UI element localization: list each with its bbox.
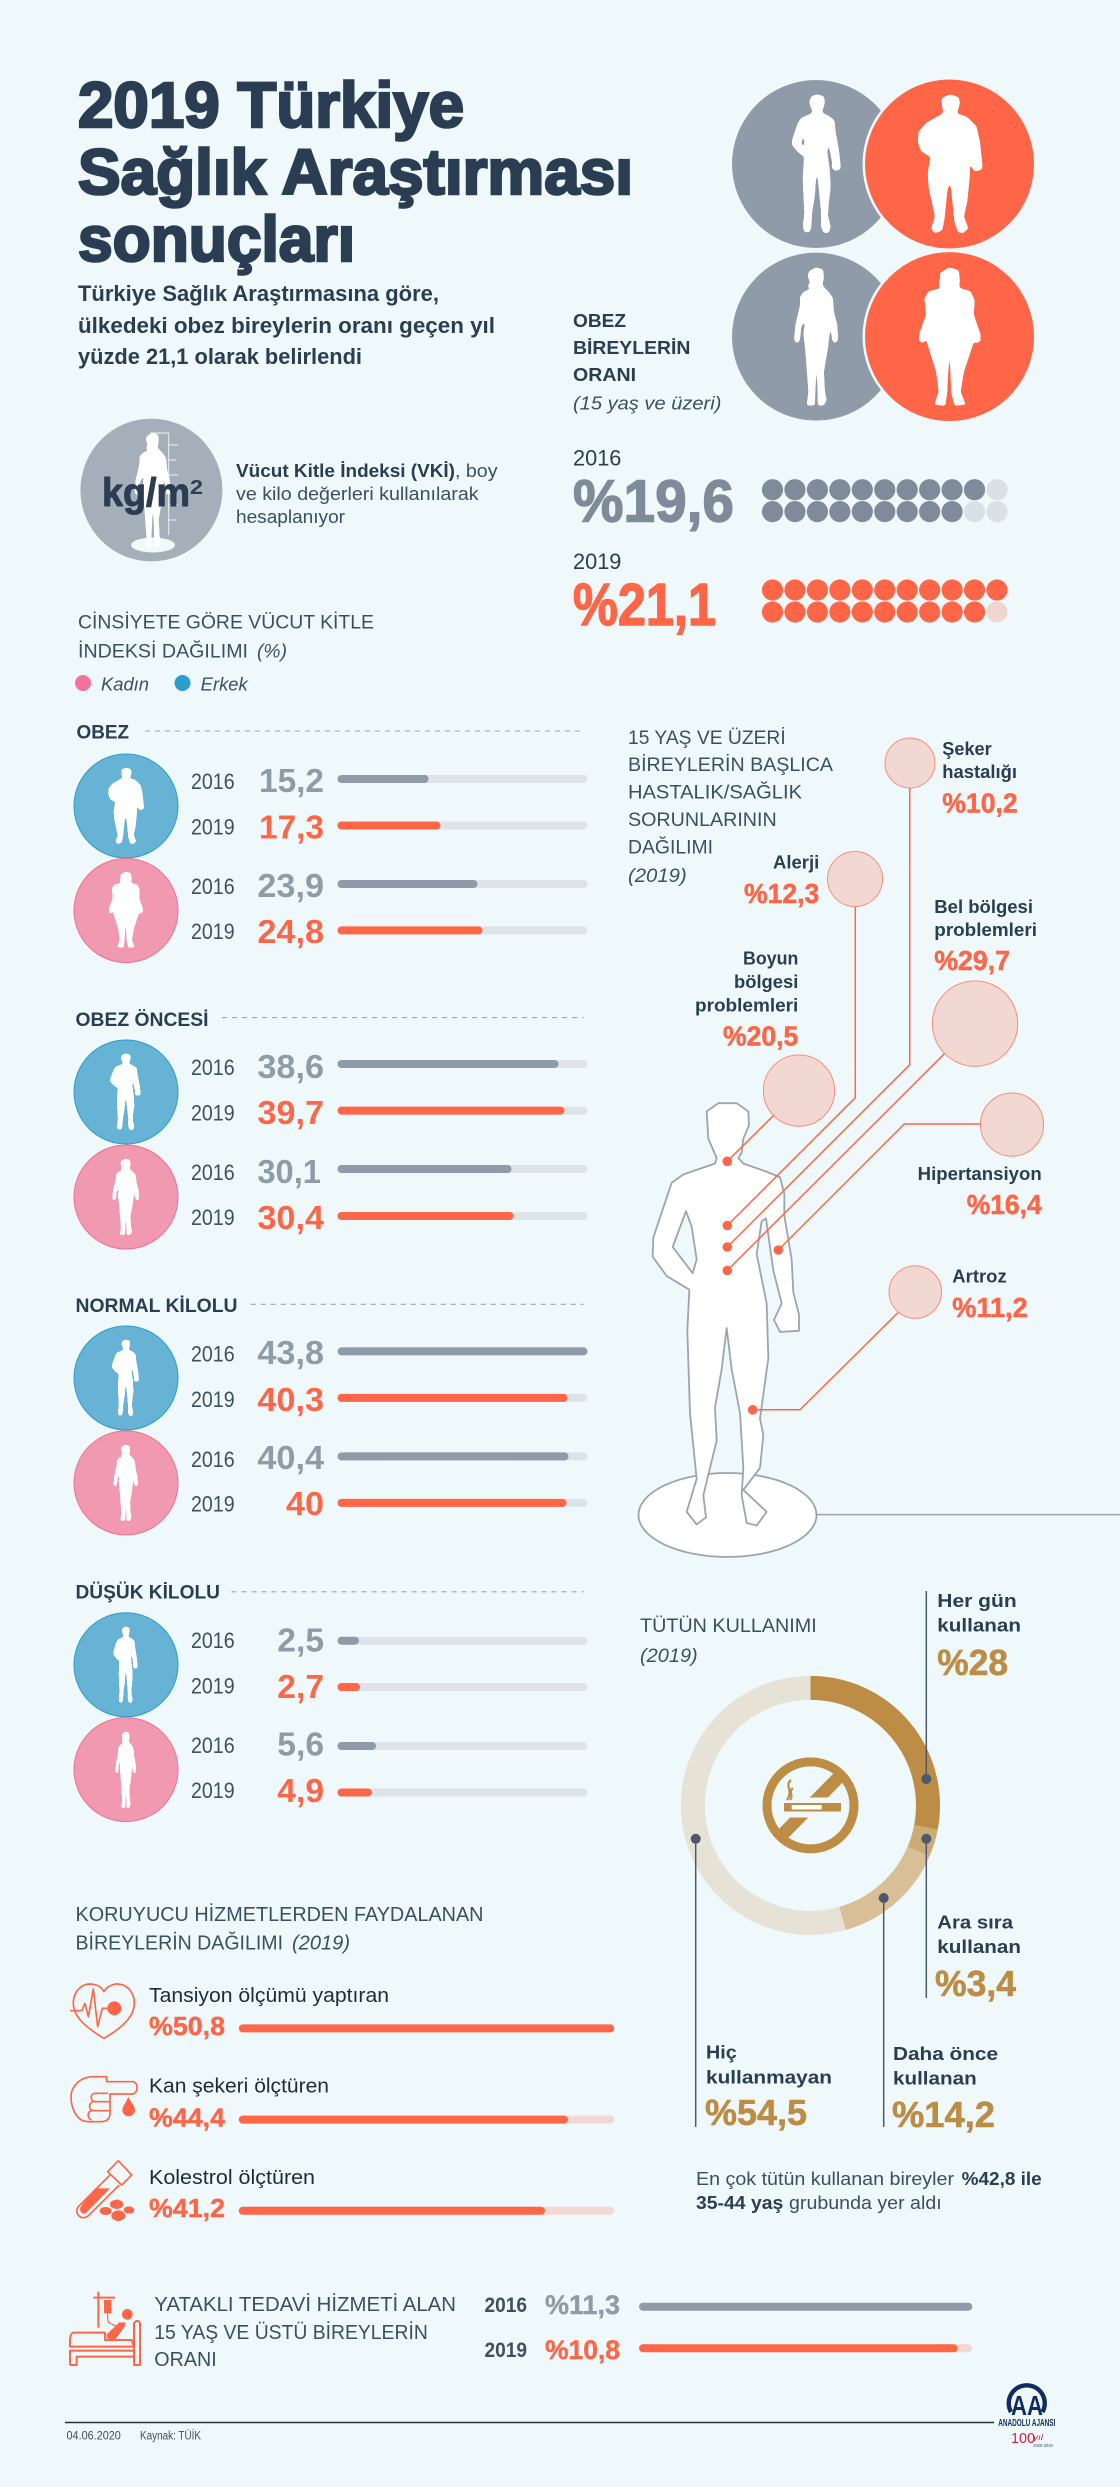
row men 2016: 15,2 [259,762,324,799]
stat: 2019 obese rate: 2019 [573,549,621,574]
callout: Bel bölgesi: %29,7 [934,945,1010,976]
row women 2019 [191,1772,588,1809]
row men 2016: 2016 [191,1628,235,1653]
callout: Daha önce: %14,2 [892,2094,995,2135]
row men 2019: 2019 [191,815,235,840]
panel: OBEZ ÖNCESİ [74,1010,588,1249]
heading: health problems: SORUNLARININ [628,810,777,831]
heading: BMI by gender: (%) [257,642,287,663]
stat: 2019 obese rate: %21,1 [573,572,716,638]
heading: health problems: HASTALIK/SAĞLIK [628,782,802,804]
row: inpatient 2016 [484,2290,972,2320]
heading: tobacco [640,1616,817,1667]
legend: Erkek [201,675,249,695]
callout: Hiç kullanmayan: %54,5 [705,2092,807,2133]
row men 2016: 2016 [191,1341,235,1366]
body dots [722,1156,783,1415]
row women 2019: 2019 [191,1205,235,1230]
icon: obese man [918,95,982,233]
icon: test tube [77,2161,134,2221]
subtitle: yüzde 21,1 olarak belirlendi [78,344,362,369]
logo: Anadolu Ajansı: 1920-2020 [1033,2443,1053,2448]
callout: Her gün: kullanan [937,1616,1021,1636]
callout: Hiç kullanmayan [691,1834,832,2133]
heading: health problems: 15 YAŞ VE ÜZERİ [628,728,786,749]
text: VKI explanation: Vücut Kitle İndeksi (VKİ) [236,461,455,481]
callout: Boyun bölgesi: Boyun [743,948,798,968]
footer rule [65,2422,994,2424]
heading: preventive services [76,1903,484,1955]
dot rows 2019 [762,579,1008,623]
logo: Anadolu Ajansı [998,2385,1055,2448]
woman circle [74,858,178,962]
callout: Boyun bölgesi [695,948,835,1126]
text: VKI explanation: hesaplanıyor [236,507,345,527]
row men 2019: 17,3 [259,808,324,846]
row women 2016: 40,4 [257,1439,325,1476]
heading: OBEZ [76,723,129,744]
note: tobacco age: En çok tütün kullanan bireyler [696,2169,954,2189]
subtitle: Türkiye Sağlık Araştırmasına göre, [78,281,439,306]
row women 2019: 24,8 [257,913,324,950]
dot rows 2016 [762,479,1008,522]
icon: finger and blood drop [71,2077,137,2122]
callout: Ara sıra: kullanan [937,1937,1021,1957]
row: Tansiyon [70,1984,614,2041]
woman circle [74,1431,178,1535]
row men 2016 [191,1334,588,1371]
row women 2016: 23,9 [257,867,324,904]
woman circle [74,1718,178,1822]
title: Sağlık Araştırması [78,136,633,208]
callout: Artroz: Artroz [952,1266,1007,1286]
heading: preventive services: (2019) [292,1933,350,1955]
row women 2016: 5,6 [277,1726,324,1763]
row: inpatient 2019: 2019 [484,2339,527,2362]
row women 2019 [191,913,588,950]
heading: health problems: (2019) [628,866,687,887]
heading: OBEZ ÖNCESİ [76,1010,208,1031]
callout: Şeker hastalığı: %10,2 [942,788,1018,818]
row: inpatient 2016: 2016 [484,2294,527,2317]
callout: Hiç kullanmayan: kullanmayan [706,2067,832,2087]
heading: DÜŞÜK KİLOLU [76,1583,220,1604]
row men 2019 [191,1668,588,1705]
callout: Daha önce [879,1893,998,2135]
subtitle [78,281,495,369]
row women 2019: 40 [286,1485,324,1522]
icon: BMI kg/m2: kg/m [102,471,190,515]
title: sonuçları [78,203,355,275]
stat: 2016 obese rate: 2016 [573,446,621,471]
text: obese rate heading [573,311,721,413]
callout: Bel bölgesi: problemleri [934,920,1037,940]
row men 2016 [191,1048,588,1085]
row men 2016: 2016 [191,769,235,794]
text: VKI explanation: ve kilo değerleri kullanılarak [236,484,480,504]
callout: Alerji: %12,3 [744,878,819,909]
note: tobacco age [696,2169,1042,2213]
callout: Daha önce: kullanan [893,2069,977,2089]
callout: Boyun bölgesi: problemleri [695,996,798,1016]
text: obese rate heading: (15 yaş ve üzeri) [573,393,721,413]
callout: Hiç kullanmayan: Hiç [706,2043,737,2063]
icon: normal man [793,95,840,232]
panel: OBEZ [74,723,588,962]
callout: Her gün: Her gün [937,1591,1017,1611]
row women 2019 [191,1199,588,1236]
panel: NORMAL KİLOLU [74,1296,588,1535]
note: tobacco age: 35-44 yaş [696,2193,783,2213]
callout: Hipertansiyon: %16,4 [967,1189,1042,1220]
body figure with platform [638,1103,1120,1557]
callout: Artroz: %11,2 [952,1292,1028,1323]
row men 2019: 39,7 [257,1094,324,1131]
row men 2016 [191,762,588,799]
callout: Şeker hastalığı: Şeker [942,739,992,759]
row: Kan şekeri: Kan şekeri ölçtüren [149,2075,329,2097]
row men 2019: 2,7 [277,1668,324,1705]
callout: Boyun bölgesi: %20,5 [723,1021,798,1052]
man circle [74,1613,178,1717]
subtitle: ülkedeki obez bireylerin oranı geçen yıl [78,313,495,338]
callout: Alerji: Alerji [773,852,819,872]
stat: 2019 obese rate [573,549,1008,638]
donut chart [693,1688,928,1923]
figures: obesity circles [732,77,1036,424]
note: tobacco age: %42,8 ile [962,2169,1042,2189]
row men 2019 [191,808,588,846]
man circle [74,1040,178,1144]
man circle [74,1326,178,1430]
title: 2019 Türkiye [78,69,464,141]
row women 2019: 4,9 [277,1772,324,1809]
heading: health problems: BİREYLERİN BAŞLICA [628,755,833,776]
stat: 2016 obese rate: %19,6 [573,468,734,534]
footer text [66,2430,201,2443]
row: Tansiyon: %50,8 [149,2011,225,2041]
title [78,69,633,275]
row women 2019: 30,4 [257,1199,325,1236]
callout: Bel bölgesi: Bel bölgesi [934,897,1033,917]
heading: inpatient rate: ORANI [154,2349,217,2371]
row women 2019 [191,1485,588,1522]
row: Kolestrol [77,2161,614,2223]
text: obese rate heading: OBEZ [573,311,626,331]
text: VKI explanation [236,461,498,527]
icon: BMI kg/m2: 2 [190,477,203,499]
callout: Daha önce: Daha önce [893,2044,998,2064]
row: Tansiyon: Tansiyon ölçümü yaptıran [149,1985,389,2007]
logo: Anadolu Ajansı: 100 [1011,2430,1035,2447]
row men 2016: 38,6 [257,1048,324,1085]
icon: normal woman [795,268,838,405]
callout: Şeker hastalığı: hastalığı [942,762,1017,782]
icon: obese woman [919,268,980,405]
logo: Anadolu Ajansı: yıl [1032,2433,1043,2442]
legend: Kadın [101,675,149,695]
row: Kan şekeri: %44,4 [149,2102,226,2132]
callout: Her gün [921,1591,1021,1784]
text: obese rate heading: BİREYLERİN [573,338,690,358]
row men 2019: 2019 [191,1100,235,1126]
row men 2019: 2019 [191,1387,235,1412]
callout: Hipertansiyon: Hipertansiyon [918,1164,1042,1184]
row women 2019: 2019 [191,919,235,944]
legend [75,675,249,695]
icon: no smoking [767,1762,854,1849]
heading: BMI by gender: CİNSİYETE GÖRE VÜCUT KİTLE [78,613,374,634]
heading: tobacco: (2019) [640,1646,698,1667]
panel: DÜŞÜK KİLOLU [74,1583,588,1822]
row men 2019: 40,3 [257,1381,324,1418]
row women 2016 [191,1439,588,1476]
stat: 2016 obese rate [573,446,1008,534]
logo: Anadolu Ajansı: ANADOLU AJANSI [998,2417,1055,2429]
row women 2019: 2019 [191,1491,235,1516]
row men 2019 [191,1381,588,1418]
row men 2016: 2,5 [277,1621,324,1658]
footer text: 04.06.2020 [66,2431,121,2443]
heading: BMI by gender [78,613,374,663]
heading: health problems [628,728,833,887]
row men 2016: 2016 [191,1055,235,1080]
callout: Artroz [889,1266,1028,1323]
connector lines [727,788,985,1410]
text: obese rate heading: ORANI [573,365,636,385]
row women 2016 [191,1726,588,1763]
row women 2016 [191,1153,588,1190]
heading: tobacco: TÜTÜN KULLANIMI [640,1616,817,1637]
row men 2016: 43,8 [257,1334,324,1371]
woman circle [74,1145,178,1249]
row: Kolestrol: Kolestrol ölçtüren [149,2167,315,2189]
row men 2019: 2019 [191,1674,235,1699]
callout: Bel bölgesi [932,897,1037,1066]
row: Kolestrol: %41,2 [149,2193,225,2223]
heading: preventive services: BİREYLERİN DAĞILIMI [76,1932,283,1955]
callout: Ara sıra: Ara sıra [937,1913,1014,1933]
heading: BMI by gender: İNDEKSİ DAĞILIMI [78,641,248,663]
callout: Hipertansiyon [918,1093,1044,1220]
row women 2016: 2016 [191,1733,235,1758]
row women 2016: 2016 [191,1447,235,1472]
row women 2016: 30,1 [257,1153,321,1190]
icon: hospital bed [70,2292,140,2365]
callout: Boyun bölgesi: bölgesi [734,972,798,992]
callout: Ara sıra [921,1834,1021,2004]
callout: Ara sıra: %3,4 [935,1963,1016,2004]
row: inpatient 2016: %11,3 [545,2290,620,2320]
row women 2016: 2016 [191,874,235,899]
callout: Her gün: %28 [937,1642,1008,1683]
icon: heart [70,1984,134,2038]
row women 2019: 2019 [191,1778,235,1803]
heading: inpatient rate [154,2293,456,2371]
man circle [74,754,178,858]
heading: inpatient rate: 15 YAŞ VE ÜSTÜ BİREYLERİN [154,2321,428,2344]
heading: preventive services: KORUYUCU HİZMETLERDEN FAYDALANAN [76,1903,484,1926]
heading: inpatient rate: YATAKLI TEDAVİ HİZMETİ ALAN [154,2293,456,2316]
heading: health problems: DAĞILIMI [628,837,713,859]
row: inpatient 2019 [484,2335,972,2365]
logo: Anadolu Ajansı: AA [1011,2390,1043,2421]
row women 2016 [191,867,588,904]
text: VKI explanation: , boy [455,461,498,481]
row: Kan şekeri [71,2075,614,2132]
heading: NORMAL KİLOLU [76,1296,238,1317]
note: tobacco age: grubunda yer aldı [789,2193,942,2213]
icon: BMI kg/m2 [80,419,222,561]
callout: Alerji [744,852,882,909]
row women 2016: 2016 [191,1160,235,1185]
row: inpatient 2019: %10,8 [545,2335,620,2365]
row men 2019 [191,1094,588,1131]
row men 2016 [191,1621,588,1658]
callout: Şeker hastalığı [885,738,1018,818]
footer text: Kaynak: TÜİK [140,2430,201,2443]
